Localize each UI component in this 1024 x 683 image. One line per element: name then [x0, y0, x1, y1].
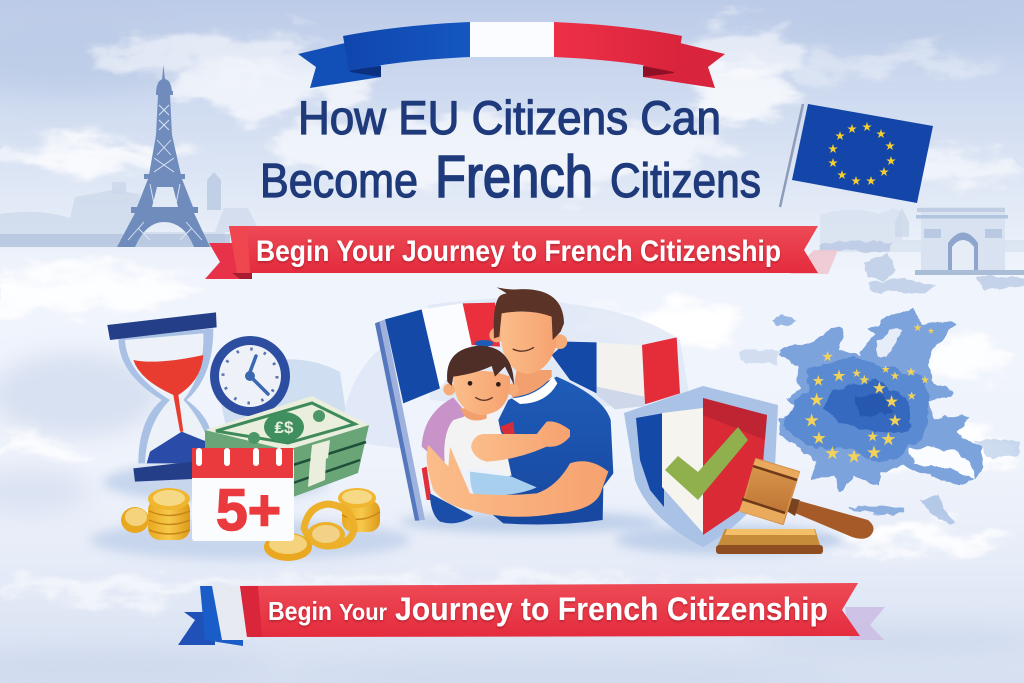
EU map with stars [740, 308, 1020, 523]
right French flag [552, 337, 680, 409]
French shield with check mark [624, 386, 778, 547]
bottom red banner: Your [339, 599, 387, 625]
EU flag [780, 104, 933, 207]
bottom red banner [178, 583, 885, 646]
title: Become [260, 155, 418, 208]
child [443, 340, 570, 496]
pale blue cloud patches under arch [820, 240, 1024, 292]
left French flag [375, 303, 500, 521]
hourglass [107, 312, 217, 482]
top tricolour ribbon [298, 22, 725, 88]
calendar 5+ [192, 448, 294, 543]
top red banner: Begin Your Journey to French Citizenship [256, 235, 781, 268]
man's arm [427, 445, 608, 517]
ground shadow under family and shield [400, 511, 845, 555]
title: French [435, 144, 593, 210]
left skyline with distant buildings [0, 172, 260, 247]
title: Citizens [610, 155, 761, 208]
money stack: ₤$ [275, 418, 294, 437]
icon group: time and money [90, 312, 410, 561]
coins [121, 488, 380, 561]
title: How EU Citizens Can [298, 91, 721, 144]
gavel [716, 459, 874, 554]
clock [210, 336, 290, 416]
bottom red banner: Journey to French Citizenship [395, 591, 828, 627]
calendar 5+: 5+ [216, 478, 281, 543]
top red banner [205, 226, 838, 279]
Arc de Triomphe and right skyline [820, 207, 1024, 275]
ground shadow [90, 462, 410, 560]
pale hill and star motif behind icons [215, 345, 410, 450]
pale swoosh behind family [428, 298, 690, 410]
title [260, 91, 761, 210]
family with French flags [375, 287, 680, 524]
money stack [205, 396, 369, 497]
Eiffel Tower [117, 65, 210, 247]
man [422, 287, 613, 524]
bottom red banner: Begin [268, 596, 332, 626]
